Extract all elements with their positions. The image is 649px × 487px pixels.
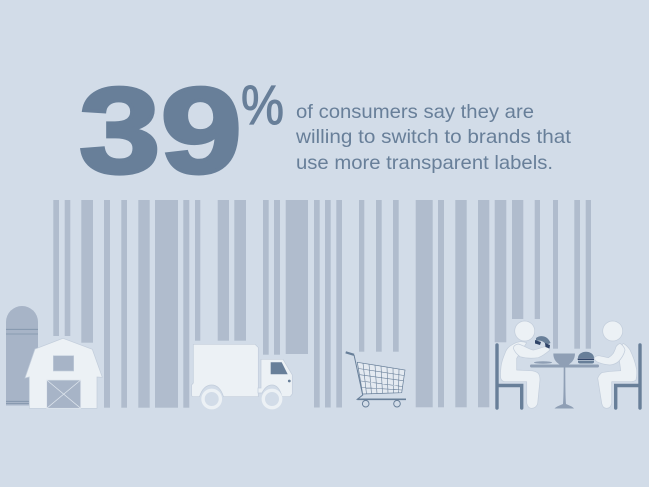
big statistic 39: 39 — [79, 62, 242, 198]
icon: shopping cart — [346, 352, 406, 407]
description text: willing to switch to brands that — [295, 126, 572, 148]
percent sign: % — [241, 73, 284, 136]
description text: of consumers say they are — [296, 101, 534, 123]
icon: burger on table — [578, 352, 594, 364]
icon: burger held — [535, 336, 550, 348]
icon: left person — [500, 321, 550, 408]
icon: left chair — [497, 345, 522, 408]
barcode — [53, 200, 591, 408]
icon: barn — [25, 338, 102, 408]
icon: delivery truck — [192, 344, 292, 408]
description text — [295, 101, 572, 174]
icon: table — [530, 354, 599, 408]
description text: use more transparent labels. — [296, 152, 553, 174]
icon: silo — [6, 306, 38, 406]
icon: right chair — [616, 345, 640, 408]
icon: right person — [594, 321, 637, 408]
